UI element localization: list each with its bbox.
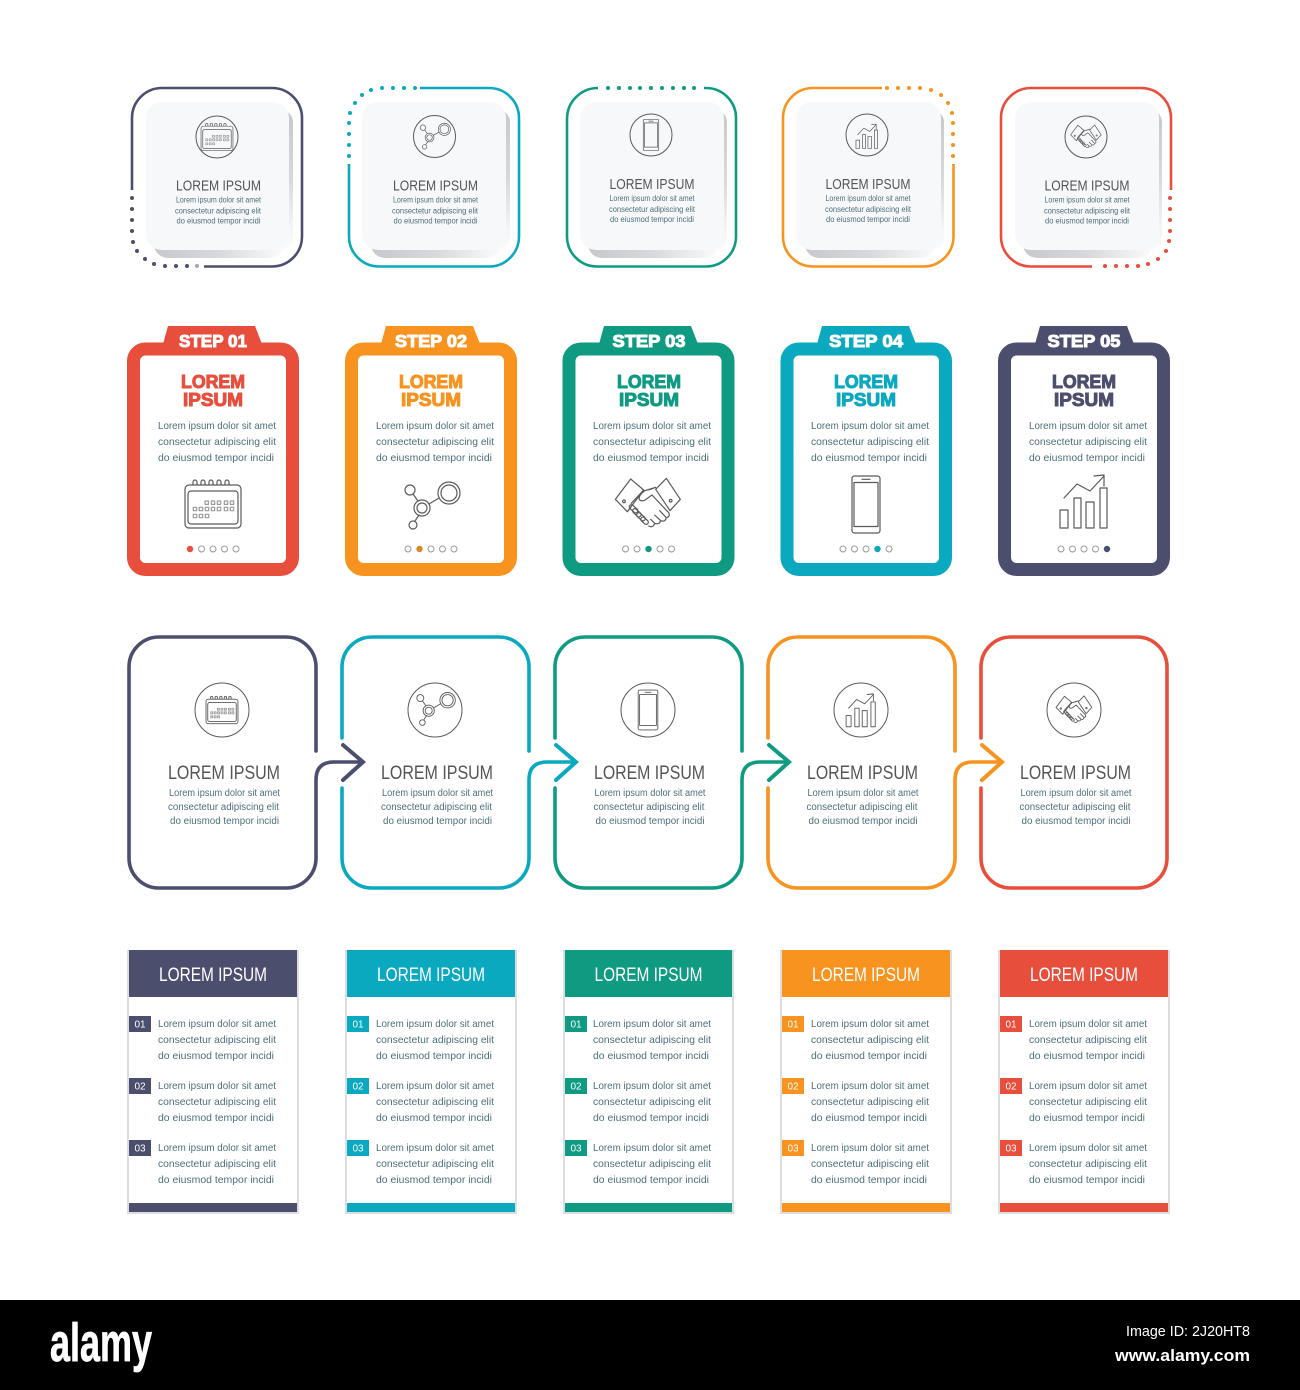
text block: do eiusmod tempor incidi	[1045, 216, 1129, 226]
text block: Lorem ipsum dolor sit amet	[158, 420, 276, 432]
text block: consectetur adipiscing elit	[1029, 436, 1147, 448]
header: LOREM IPSUM	[1030, 964, 1138, 986]
title	[834, 371, 898, 410]
panel: row 1 card 2	[347, 86, 519, 266]
icon: phone	[630, 114, 672, 156]
item 03: Lorem ipsum dolor sit amet	[376, 1142, 494, 1154]
text block: Lorem ipsum dolor sit amet	[1044, 196, 1130, 204]
item 01: do eiusmod tempor incidi	[158, 1050, 274, 1062]
icon: calendar	[196, 116, 238, 158]
text block: Lorem ipsum dolor sit amet	[1029, 420, 1147, 432]
heading: LOREM IPSUM	[176, 178, 261, 194]
website: www.alamy.com	[1114, 1346, 1250, 1365]
item 03	[129, 1140, 276, 1186]
item 02: consectetur adipiscing elit	[811, 1096, 929, 1108]
text block: consectetur adipiscing elit	[1044, 206, 1131, 216]
item 02: 02	[352, 1082, 364, 1092]
text block	[594, 788, 706, 827]
item 01: 01	[787, 1020, 799, 1030]
item 01: Lorem ipsum dolor sit amet	[158, 1018, 276, 1030]
item 01: do eiusmod tempor incidi	[376, 1050, 492, 1062]
heading: LOREM IPSUM	[1020, 762, 1131, 784]
panel: flow card 3	[555, 637, 789, 888]
icon: handshake	[1065, 116, 1107, 158]
item 03: 03	[134, 1144, 146, 1154]
text block: consectetur adipiscing elit	[609, 205, 696, 214]
header	[565, 950, 732, 997]
item 02: 02	[787, 1082, 799, 1092]
icon: molecule	[405, 482, 460, 529]
progress dots	[187, 546, 239, 552]
item 03: Lorem ipsum dolor sit amet	[1029, 1142, 1147, 1154]
item 02: 02	[1005, 1082, 1017, 1092]
item 01: do eiusmod tempor incidi	[1029, 1050, 1145, 1062]
text block: Lorem ipsum dolor sit amet	[1020, 788, 1132, 799]
outline and arrow	[768, 637, 1002, 888]
text block	[168, 788, 280, 827]
title: IPSUM	[836, 389, 896, 410]
item 03: Lorem ipsum dolor sit amet	[158, 1142, 276, 1154]
item 03: consectetur adipiscing elit	[593, 1158, 711, 1170]
text block: do eiusmod tempor incidi	[394, 216, 478, 226]
text block: consectetur adipiscing elit	[158, 436, 276, 448]
panel: list card 3	[563, 950, 734, 1214]
header	[129, 950, 297, 997]
item 01: consectetur adipiscing elit	[376, 1034, 494, 1046]
item 03: do eiusmod tempor incidi	[1029, 1174, 1145, 1186]
icon: chart	[1060, 475, 1107, 528]
step label: STEP 01	[179, 331, 247, 351]
item 01: 01	[352, 1020, 364, 1030]
item 02: 02	[570, 1082, 582, 1092]
item 02: Lorem ipsum dolor sit amet	[593, 1080, 711, 1092]
text block: consectetur adipiscing elit	[381, 802, 492, 813]
item 03	[347, 1140, 494, 1186]
heading: LOREM IPSUM	[594, 762, 705, 784]
text block: Lorem ipsum dolor sit amet	[808, 788, 919, 799]
item 02: Lorem ipsum dolor sit amet	[811, 1080, 929, 1092]
title	[1052, 371, 1116, 410]
header: LOREM IPSUM	[377, 964, 485, 986]
text block: consectetur adipiscing elit	[1020, 802, 1131, 813]
item 01	[129, 1016, 276, 1062]
item 01: do eiusmod tempor incidi	[593, 1050, 709, 1062]
icon: handshake	[615, 478, 680, 527]
title: IPSUM	[183, 389, 243, 410]
header: LOREM IPSUM	[812, 964, 920, 986]
text block: consectetur adipiscing elit	[168, 802, 279, 813]
text block: Lorem ipsum dolor sit amet	[593, 420, 711, 432]
panel: list card 2	[345, 950, 517, 1214]
header: LOREM IPSUM	[594, 964, 702, 986]
item 03: do eiusmod tempor incidi	[811, 1174, 927, 1186]
text block: do eiusmod tempor incidi	[811, 452, 927, 464]
text block: consectetur adipiscing elit	[825, 205, 912, 214]
text block: Lorem ipsum dolor sit amet	[176, 196, 262, 204]
text block: do eiusmod tempor incidi	[808, 816, 918, 827]
panel: flow card 1	[129, 637, 363, 888]
item 02: 02	[134, 1082, 146, 1092]
item 02: consectetur adipiscing elit	[376, 1096, 494, 1108]
text block: do eiusmod tempor incidi	[596, 816, 704, 827]
text block: consectetur adipiscing elit	[806, 802, 918, 813]
item 02: Lorem ipsum dolor sit amet	[158, 1080, 276, 1092]
icon: calendar	[195, 683, 249, 737]
item 02: do eiusmod tempor incidi	[811, 1112, 927, 1124]
text block	[811, 420, 929, 464]
item 01: 01	[570, 1020, 582, 1030]
title: LOREM	[1052, 371, 1116, 392]
item 02	[782, 1078, 929, 1124]
panel: step 02	[352, 326, 510, 570]
item 03	[782, 1140, 929, 1186]
text block	[825, 194, 912, 224]
text block: Lorem ipsum dolor sit amet	[376, 420, 494, 432]
item 02: consectetur adipiscing elit	[1029, 1096, 1147, 1108]
heading: LOREM IPSUM	[826, 177, 910, 193]
panel: list card 1	[127, 950, 299, 1214]
panel: list card 5	[998, 950, 1170, 1214]
title: IPSUM	[1054, 389, 1114, 410]
header	[347, 950, 515, 997]
header	[782, 950, 950, 997]
title: LOREM	[834, 371, 898, 392]
title	[181, 371, 245, 410]
text block	[158, 420, 276, 464]
panel: row 1 card 1	[130, 88, 302, 268]
title: IPSUM	[401, 389, 461, 410]
heading: LOREM IPSUM	[610, 177, 694, 193]
panel: step 04	[787, 326, 946, 570]
text block	[609, 194, 696, 224]
text block: consectetur adipiscing elit	[376, 436, 494, 448]
item 03: 03	[787, 1144, 799, 1154]
text block: Lorem ipsum dolor sit amet	[826, 194, 911, 203]
heading: LOREM IPSUM	[1044, 178, 1130, 194]
item 02	[1000, 1078, 1147, 1124]
text block: consectetur adipiscing elit	[594, 802, 705, 813]
item 03: do eiusmod tempor incidi	[593, 1174, 709, 1186]
icon: phone	[852, 476, 880, 533]
icon: chart	[834, 683, 888, 737]
item 01: consectetur adipiscing elit	[158, 1034, 276, 1046]
item 02	[129, 1078, 276, 1124]
icon: chart	[846, 114, 888, 156]
image id: Image ID: 2J20HT8	[1126, 1323, 1250, 1340]
text block: do eiusmod tempor incidi	[158, 452, 274, 464]
item 03: consectetur adipiscing elit	[376, 1158, 494, 1170]
item 02	[347, 1078, 494, 1124]
text block: do eiusmod tempor incidi	[826, 215, 910, 224]
text block	[392, 196, 479, 226]
item 03: do eiusmod tempor incidi	[158, 1174, 274, 1186]
item 02	[565, 1078, 711, 1124]
progress dots	[405, 546, 457, 552]
item 01: consectetur adipiscing elit	[1029, 1034, 1147, 1046]
item 02: do eiusmod tempor incidi	[593, 1112, 709, 1124]
text block: Lorem ipsum dolor sit amet	[610, 194, 695, 203]
item 03: 03	[570, 1144, 582, 1154]
progress dots	[840, 546, 892, 552]
item 01: Lorem ipsum dolor sit amet	[376, 1018, 494, 1030]
item 01	[1000, 1016, 1147, 1062]
panel: flow card 5	[981, 637, 1167, 888]
panel: row 1 card 5	[1001, 88, 1172, 268]
footer bar	[0, 1300, 1300, 1390]
title: LOREM	[617, 371, 681, 392]
panel: step 01	[134, 326, 292, 570]
text block	[1029, 420, 1147, 464]
step label: STEP 03	[612, 331, 686, 351]
icon: handshake	[1047, 683, 1101, 737]
text block: do eiusmod tempor incidi	[176, 216, 261, 226]
text block: Lorem ipsum dolor sit amet	[594, 788, 706, 799]
item 02: do eiusmod tempor incidi	[1029, 1112, 1145, 1124]
item 02: do eiusmod tempor incidi	[376, 1112, 492, 1124]
panel: flow card 2	[342, 637, 576, 888]
progress dots	[622, 546, 674, 552]
text block	[593, 420, 711, 464]
outline and arrow	[129, 637, 363, 888]
item 02: Lorem ipsum dolor sit amet	[376, 1080, 494, 1092]
title: IPSUM	[619, 389, 679, 410]
item 01: Lorem ipsum dolor sit amet	[593, 1018, 711, 1030]
text block: do eiusmod tempor incidi	[170, 816, 279, 827]
heading: LOREM IPSUM	[393, 178, 478, 194]
text block: do eiusmod tempor incidi	[610, 215, 694, 224]
item 03: do eiusmod tempor incidi	[376, 1174, 492, 1186]
panel: step 05	[1004, 326, 1164, 570]
item 01: Lorem ipsum dolor sit amet	[811, 1018, 929, 1030]
icon: molecule	[408, 683, 462, 737]
text block: do eiusmod tempor incidi	[1022, 816, 1130, 827]
text block	[175, 196, 262, 226]
item 03: 03	[1005, 1144, 1017, 1154]
item 02: consectetur adipiscing elit	[158, 1096, 276, 1108]
title: LOREM	[181, 371, 245, 392]
item 03: 03	[352, 1144, 364, 1154]
text block: Lorem ipsum dolor sit amet	[811, 420, 929, 432]
panel: row 1 card 4	[783, 86, 955, 266]
item 01: consectetur adipiscing elit	[811, 1034, 929, 1046]
text block: do eiusmod tempor incidi	[593, 452, 709, 464]
step label: STEP 02	[395, 331, 467, 351]
text block	[376, 420, 494, 464]
item 01: consectetur adipiscing elit	[593, 1034, 711, 1046]
text block: consectetur adipiscing elit	[175, 206, 262, 216]
item 02: consectetur adipiscing elit	[593, 1096, 711, 1108]
item 01	[565, 1016, 711, 1062]
outline	[981, 637, 1167, 888]
step label: STEP 05	[1048, 331, 1121, 351]
item 03: consectetur adipiscing elit	[811, 1158, 929, 1170]
text block: consectetur adipiscing elit	[811, 436, 929, 448]
text block	[1020, 788, 1132, 827]
text block: Lorem ipsum dolor sit amet	[393, 196, 479, 204]
progress dots	[1058, 546, 1110, 552]
text block	[806, 788, 919, 827]
item 02: Lorem ipsum dolor sit amet	[1029, 1080, 1147, 1092]
panel: flow card 4	[768, 637, 1002, 888]
item 03	[565, 1140, 711, 1186]
header: LOREM IPSUM	[159, 964, 267, 986]
heading: LOREM IPSUM	[807, 762, 918, 784]
item 03: consectetur adipiscing elit	[158, 1158, 276, 1170]
item 03	[1000, 1140, 1147, 1186]
title: LOREM	[399, 371, 463, 392]
panel: row 1 card 3	[567, 86, 736, 266]
text block: Lorem ipsum dolor sit amet	[169, 788, 280, 799]
heading: LOREM IPSUM	[381, 762, 493, 784]
icon: calendar	[185, 480, 241, 528]
item 01: do eiusmod tempor incidi	[811, 1050, 927, 1062]
item 01: 01	[1005, 1020, 1017, 1030]
text block	[1044, 196, 1131, 226]
icon: molecule	[414, 116, 456, 158]
outline and arrow	[342, 637, 576, 888]
text block: do eiusmod tempor incidi	[1029, 452, 1145, 464]
logo: alamy	[50, 1313, 152, 1373]
outline and arrow	[555, 637, 789, 888]
item 03: Lorem ipsum dolor sit amet	[811, 1142, 929, 1154]
step label: STEP 04	[829, 331, 903, 351]
text block	[381, 788, 493, 827]
title	[617, 371, 681, 410]
title	[399, 371, 463, 410]
panel: list card 4	[780, 950, 952, 1214]
header	[1000, 950, 1168, 997]
item 03: consectetur adipiscing elit	[1029, 1158, 1147, 1170]
icon: phone	[621, 683, 675, 737]
text block: do eiusmod tempor incidi	[376, 452, 492, 464]
item 01: Lorem ipsum dolor sit amet	[1029, 1018, 1147, 1030]
text block: consectetur adipiscing elit	[392, 206, 479, 216]
item 01: 01	[134, 1020, 146, 1030]
item 02: do eiusmod tempor incidi	[158, 1112, 274, 1124]
text block: Lorem ipsum dolor sit amet	[382, 788, 493, 799]
heading: LOREM IPSUM	[168, 762, 280, 784]
item 01	[782, 1016, 929, 1062]
item 03: Lorem ipsum dolor sit amet	[593, 1142, 711, 1154]
text block: do eiusmod tempor incidi	[383, 816, 492, 827]
panel: step 03	[569, 326, 728, 570]
item 01	[347, 1016, 494, 1062]
text block: consectetur adipiscing elit	[593, 436, 711, 448]
